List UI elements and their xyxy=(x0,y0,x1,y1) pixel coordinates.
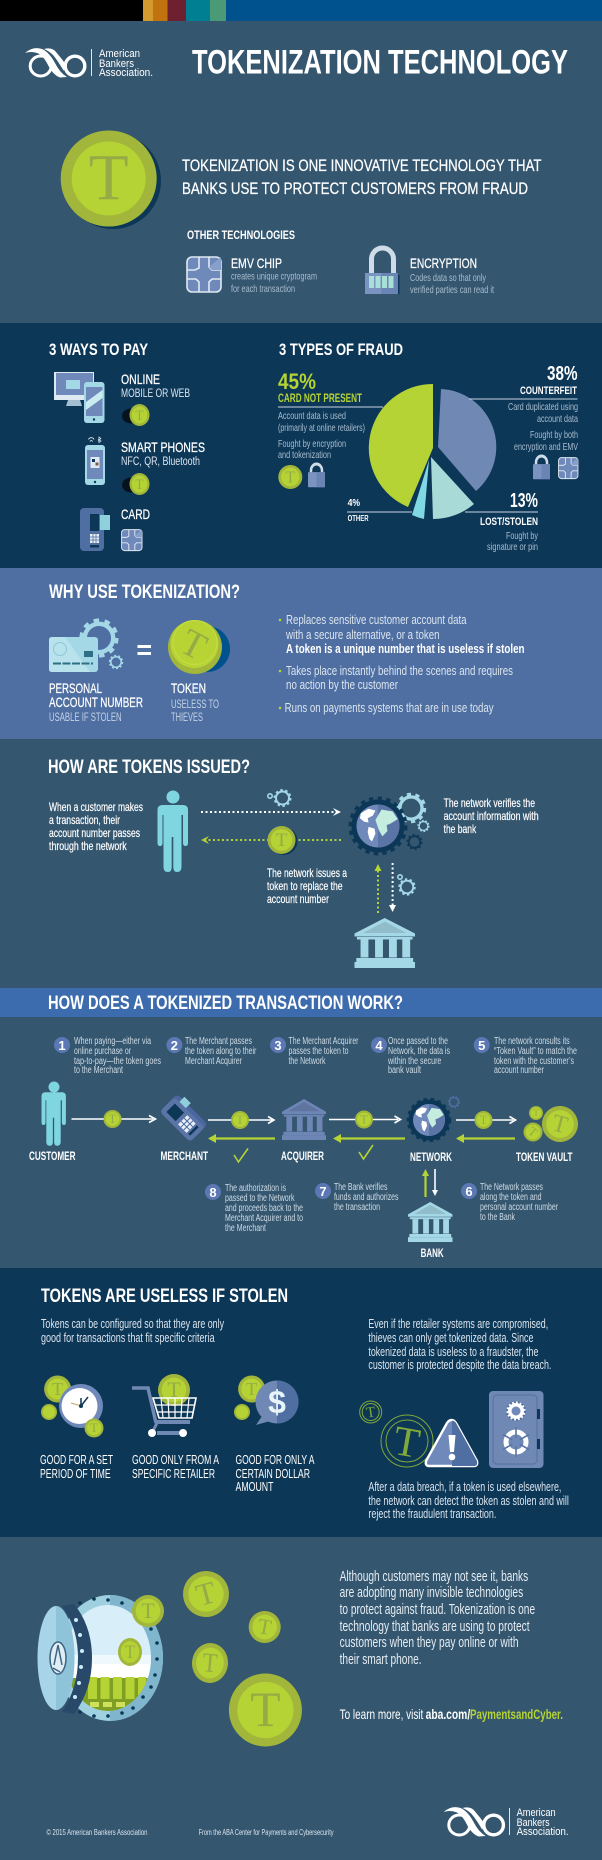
step 3: 3 xyxy=(274,1038,282,1053)
step 5: account number xyxy=(494,1065,544,1076)
callout: 13% lost or stolen xyxy=(465,490,539,553)
icon: shopping cart with token: T xyxy=(167,1378,181,1402)
icon: network globe xyxy=(408,1097,459,1140)
arrow: merchant to acquirer: T xyxy=(236,1113,244,1127)
text: customer makes a transaction: When a customer makes xyxy=(49,800,143,814)
callout: 13% lost or stolen: Fought by xyxy=(506,530,539,542)
panel: header band how does a tokenized transaction work: HOW DOES A TOKENIZED TRANSACTION WORK? xyxy=(48,993,403,1014)
step 4: 4 xyxy=(375,1038,383,1053)
step 8 xyxy=(205,1183,303,1234)
step 7 xyxy=(315,1182,398,1213)
icon: network globe and gears xyxy=(350,794,429,854)
callout: 45% card not present: 45% xyxy=(278,369,316,394)
icon: card terminal xyxy=(80,508,110,551)
label: token: TOKEN xyxy=(171,680,206,696)
label: token: USELESS TO xyxy=(171,699,219,711)
icon: token online: T xyxy=(135,407,144,424)
icon: main token coin xyxy=(61,130,161,229)
heading: how are tokens issued: HOW ARE TOKENS ISSUED? xyxy=(48,757,250,778)
text: encryption: verified parties can read it xyxy=(410,284,494,296)
icon: outlined stolen tokens: T xyxy=(390,1418,423,1468)
labels: token criteria: SPECIFIC RETAILER xyxy=(132,1467,215,1481)
flow labels: MERCHANT xyxy=(160,1149,209,1163)
icon: dollar speech bubble with tokens xyxy=(231,1376,298,1425)
arrows: network and bank xyxy=(422,1169,438,1197)
text: configuration intro: good for transactions that fit specific criteria xyxy=(41,1330,215,1345)
callout: 45% card not present xyxy=(278,369,383,489)
icon: token online xyxy=(122,404,150,426)
icon: equals sign xyxy=(138,645,151,655)
logo: American Bankers Association header: Association. xyxy=(99,67,153,79)
step 1: to the Merchant xyxy=(74,1065,123,1076)
flow labels xyxy=(29,1149,573,1260)
step 1 xyxy=(54,1036,161,1076)
icon: outlined stolen tokens xyxy=(360,1401,433,1468)
icon: open vault: T xyxy=(125,1641,135,1662)
step 7: 7 xyxy=(319,1184,327,1199)
text: learn more link: aba.com/ xyxy=(426,1706,470,1722)
text: network verifies: account information with xyxy=(444,809,539,823)
heading: other technologies: OTHER TECHNOLOGIES xyxy=(187,228,295,242)
list: benefits: Takes place instantly behind the scenes and requires xyxy=(286,663,513,678)
panel: why use tokenization xyxy=(0,568,602,739)
icon: token smart phones: T xyxy=(135,476,144,493)
icon: tilted token: T xyxy=(173,621,214,669)
flow labels: CUSTOMER xyxy=(29,1149,76,1163)
step 6: The Network passes xyxy=(480,1182,543,1193)
text: EMV chip xyxy=(231,255,317,295)
icon: clock with tokens: T xyxy=(52,1379,63,1399)
text: EMV chip: creates unique cryptogram xyxy=(231,270,317,282)
icon: small gears above arrow xyxy=(268,790,291,806)
step 8: 8 xyxy=(209,1185,217,1200)
callout: 38% counterfeit: COUNTERFEIT xyxy=(520,385,577,397)
top colour bar xyxy=(0,0,602,21)
labels: token criteria: GOOD ONLY FROM A xyxy=(132,1453,219,1467)
icon: dollar speech bubble with tokens: T xyxy=(246,1379,257,1399)
icon: clock with tokens xyxy=(38,1376,104,1438)
icon: merchant terminal xyxy=(160,1092,210,1142)
text: learn more link: To learn more, visit xyxy=(340,1706,423,1722)
logo: American Bankers Association header: American xyxy=(99,48,140,60)
text: customer makes a transaction xyxy=(49,800,143,853)
labels: token criteria: AMOUNT xyxy=(236,1480,274,1494)
step 3: passes the token to xyxy=(288,1046,349,1057)
icon: token vault coins xyxy=(520,1102,582,1146)
text: closing paragraph xyxy=(340,1569,535,1668)
step 4: within the secure xyxy=(387,1056,442,1067)
intro statement xyxy=(182,157,542,198)
step 1: When paying—either via xyxy=(74,1036,151,1047)
step 6: personal account number xyxy=(480,1202,558,1213)
arrow: network to bank xyxy=(389,863,396,912)
callout: 45% card not present: Account data is used xyxy=(278,410,346,422)
step 4: Network, the data is xyxy=(388,1046,450,1057)
icon: encryption lock xyxy=(365,248,400,294)
heading: 3 types of fraud: 3 TYPES OF FRAUD xyxy=(279,341,403,359)
text: network issues a token: account number xyxy=(267,892,329,906)
logo: American Bankers Association header: Bankers xyxy=(99,58,134,70)
arrow: customer to merchant xyxy=(72,1110,156,1128)
list: benefits: with a secure alternative, or a token xyxy=(285,627,440,642)
labels: token criteria xyxy=(40,1453,315,1494)
list: benefits xyxy=(279,612,525,715)
panel: tokens are useless if stolen xyxy=(0,1268,602,1537)
step 2 xyxy=(166,1036,257,1067)
icon: floating tokens: T xyxy=(256,1614,273,1640)
icon: floating tokens: T xyxy=(201,1647,219,1679)
icon: token vault coins: T xyxy=(549,1109,571,1139)
text: smart phones: SMART PHONES xyxy=(121,439,205,455)
icon: outlined stolen tokens: T xyxy=(365,1404,376,1422)
icon: card chip xyxy=(122,530,142,551)
text: network issues a token: The network issues a xyxy=(267,866,347,880)
callout: 45% card not present: CARD NOT PRESENT xyxy=(278,393,362,405)
text: configuration intro: Tokens can be configured so that they are only xyxy=(41,1316,224,1331)
step 4: bank vault xyxy=(388,1065,421,1076)
text: encryption xyxy=(410,255,494,296)
text: network issues a token: token to replace the xyxy=(267,879,343,893)
text: network issues a token xyxy=(267,866,347,906)
intro statement: BANKS USE TO PROTECT CUSTOMERS FROM FRAUD xyxy=(182,180,528,198)
callout: 45% card not present: Fought by encryption xyxy=(278,438,346,450)
text: network verifies: The network verifies the xyxy=(444,796,535,810)
labels: token criteria: CERTAIN DOLLAR xyxy=(236,1467,310,1481)
callout: 4% other: 4% xyxy=(348,498,360,509)
step 7: the transaction xyxy=(334,1202,380,1213)
callout: 38% counterfeit xyxy=(469,363,578,479)
flow labels: TOKEN VAULT xyxy=(516,1150,573,1164)
arrow: token back to customer with coin: T xyxy=(276,830,288,851)
footer: copyright: © 2015 American Bankers Association xyxy=(46,1828,148,1837)
callout: 13% lost or stolen: LOST/STOLEN xyxy=(480,516,538,528)
text: card: CARD xyxy=(121,506,150,522)
step 2: the token along to their xyxy=(185,1046,257,1057)
callout: 4% other xyxy=(347,498,412,523)
step 1: tap-to-pay—the token goes xyxy=(74,1056,161,1067)
callout: 4% other: OTHER xyxy=(348,514,369,523)
icon: acquirer bank xyxy=(282,1099,326,1140)
text: network verifies: the bank xyxy=(444,822,477,836)
icon: token smart phones xyxy=(122,473,150,495)
list: benefits: Runs on payments systems that are in use today xyxy=(285,700,494,715)
label: token xyxy=(171,680,219,724)
list: benefits: A token is a unique number that is useless if stolen xyxy=(286,641,525,656)
panel: ways to pay and fraud types xyxy=(0,323,602,568)
logo: American Bankers Association footer xyxy=(444,1807,569,1838)
icon: token vault coins: T xyxy=(533,1109,539,1119)
icon: open vault xyxy=(38,1595,164,1721)
callout: 45% card not present: (primarily at online retailers) xyxy=(278,422,365,434)
callout: 38% counterfeit: Fought by both xyxy=(530,429,578,441)
step 8: Merchant Acquirer and to xyxy=(225,1213,303,1224)
icon: floating tokens: T xyxy=(192,1574,220,1613)
step 6: 6 xyxy=(465,1184,473,1199)
icon: open vault: T xyxy=(141,1599,155,1623)
text: configuration intro xyxy=(41,1316,224,1345)
text: smart phones: NFC, QR, Bluetooth xyxy=(121,456,200,468)
text: EMV chip: EMV CHIP xyxy=(231,255,282,271)
icon: smart phone with QR xyxy=(85,437,105,485)
logo: American Bankers Association footer: American xyxy=(517,1807,556,1819)
logo: American Bankers Association header xyxy=(25,48,153,79)
step 8: the Merchant xyxy=(225,1223,266,1234)
step 6: along the token and xyxy=(480,1192,542,1203)
callout: 13% lost or stolen: 13% xyxy=(510,490,538,512)
arrow: bank to network xyxy=(374,864,382,913)
step 3: the Network xyxy=(288,1056,326,1067)
icon: customer figure xyxy=(42,1082,66,1146)
labels: token criteria: GOOD FOR ONLY A xyxy=(236,1453,315,1467)
icon: safe xyxy=(489,1391,544,1468)
icon: bank xyxy=(354,918,415,968)
arrow: account number to network xyxy=(201,808,341,816)
text: customer makes a transaction: through the network xyxy=(49,839,127,853)
heading: tokens are useless if stolen: TOKENS ARE USELESS IF STOLEN xyxy=(41,1286,288,1307)
text: encryption: Codes data so that only xyxy=(410,272,487,284)
icon: floating tokens xyxy=(178,1566,302,1746)
pie chart: fraud types xyxy=(369,384,496,519)
step 4: Once passed to the xyxy=(388,1036,448,1047)
text: encryption: ENCRYPTION xyxy=(410,255,477,271)
text: closing paragraph: are adopting many invisible technologies xyxy=(340,1585,523,1601)
labels: token criteria: PERIOD OF TIME xyxy=(40,1467,111,1481)
text: retailer compromised xyxy=(368,1316,551,1372)
step 2: The Merchant passes xyxy=(185,1036,252,1047)
footer: source: From the ABA Center for Payments and Cybersecurity xyxy=(199,1828,334,1837)
icon: dollar speech bubble with tokens: $ xyxy=(268,1384,286,1420)
step 6 xyxy=(461,1182,558,1223)
text: online: ONLINE xyxy=(121,371,160,387)
step 1: online purchase or xyxy=(74,1046,131,1057)
callout: 38% counterfeit: 38% xyxy=(547,363,578,385)
icon: shopping cart with token xyxy=(132,1374,196,1437)
heading: why use tokenization: WHY USE TOKENIZATION? xyxy=(49,582,240,603)
arrows: authorization return path xyxy=(208,1134,515,1143)
callout: 38% counterfeit: account data xyxy=(537,413,578,425)
step 7: The Bank verifies xyxy=(334,1182,387,1193)
icon: tilted token xyxy=(168,620,230,674)
step 7: funds and authorizes xyxy=(334,1192,398,1203)
step 5: 5 xyxy=(478,1038,485,1053)
flow labels: BANK xyxy=(421,1246,444,1260)
arrow: merchant to acquirer xyxy=(208,1111,274,1129)
text: online xyxy=(121,371,190,400)
text: customer makes a transaction: account number passes xyxy=(49,826,140,840)
arrow: acquirer to network: T xyxy=(360,1112,368,1126)
icon: credit card and gears xyxy=(49,620,122,672)
step 2: 2 xyxy=(171,1038,178,1053)
logo: American Bankers Association footer: Bankers xyxy=(517,1817,550,1829)
text: customer makes a transaction: a transaction, their xyxy=(49,813,120,827)
text: closing paragraph: their smart phone. xyxy=(340,1652,422,1668)
text: EMV chip: for each transaction xyxy=(231,283,295,295)
callout: 45% card not present: T xyxy=(285,467,295,486)
callout: 45% card not present: and tokenization xyxy=(278,449,331,461)
panel: header band how does a tokenized transaction work xyxy=(0,988,602,1017)
icon: gears beside vertical arrows xyxy=(398,875,415,895)
icon: warning triangle xyxy=(426,1420,477,1466)
arrow: network to token vault xyxy=(456,1111,516,1129)
label: personal account number: ACCOUNT NUMBER xyxy=(49,694,143,710)
flow labels: ACQUIRER xyxy=(281,1149,324,1163)
step 2: Merchant Acquirer xyxy=(185,1056,242,1067)
text: learn more link xyxy=(340,1706,563,1722)
arrow: token back to customer with coin xyxy=(201,826,341,855)
icon: clock with tokens: T xyxy=(90,1420,98,1435)
step 5 xyxy=(474,1036,577,1076)
icon: bank building xyxy=(408,1202,452,1242)
text: closing paragraph: customers when they pay online or with xyxy=(340,1635,519,1651)
icon: token vault coins: T xyxy=(525,1123,541,1140)
arrow: acquirer to network xyxy=(329,1110,400,1128)
label: token: THIEVES xyxy=(171,712,203,724)
text: online: MOBILE OR WEB xyxy=(121,388,190,400)
arrow: customer to merchant: T xyxy=(109,1112,117,1126)
step 6: to the Bank xyxy=(480,1212,516,1223)
label: personal account number: USABLE IF STOLEN xyxy=(49,712,122,724)
step 8: passed to the Network xyxy=(225,1193,295,1204)
text: after a data breach xyxy=(368,1479,569,1521)
step 5: The network consults its xyxy=(494,1036,570,1047)
icon: floating tokens: T xyxy=(250,1682,281,1737)
icon: customer xyxy=(158,790,188,872)
labels: token criteria: GOOD FOR A SET xyxy=(40,1453,113,1467)
text: learn more link: PaymentsandCyber. xyxy=(470,1706,563,1722)
arrow: network to token vault: T xyxy=(480,1113,488,1127)
step 8: and proceeds back to the xyxy=(225,1203,303,1214)
flow labels: NETWORK xyxy=(410,1150,452,1164)
icon: check marks xyxy=(234,1145,373,1162)
label: personal account number xyxy=(49,680,143,724)
step 3 xyxy=(270,1036,359,1067)
callout: 13% lost or stolen: signature or pin xyxy=(487,541,538,553)
text: after a data breach: reject the fraudulent transaction. xyxy=(368,1506,496,1521)
step 1: 1 xyxy=(58,1038,66,1053)
text: closing paragraph: Although customers may not see it, banks xyxy=(340,1569,528,1585)
icon: monitor and phone xyxy=(54,372,104,423)
heading: 3 ways to pay: 3 WAYS TO PAY xyxy=(49,341,148,359)
text: closing paragraph: technology that banks are using to protect xyxy=(340,1619,530,1635)
list: benefits: no action by the customer xyxy=(286,677,399,692)
icon: main token coin: T xyxy=(89,143,129,215)
step 8: The authorization is xyxy=(225,1183,286,1194)
label: personal account number: PERSONAL xyxy=(49,680,102,696)
logo: American Bankers Association footer: Association. xyxy=(517,1826,569,1838)
icon: EMV chip xyxy=(187,257,221,292)
list: benefits: Replaces sensitive customer account data xyxy=(286,612,467,627)
step 3: The Merchant Acquirer xyxy=(288,1036,359,1047)
text: network verifies xyxy=(444,796,539,836)
text: smart phones xyxy=(121,439,205,468)
step 4 xyxy=(371,1036,450,1076)
